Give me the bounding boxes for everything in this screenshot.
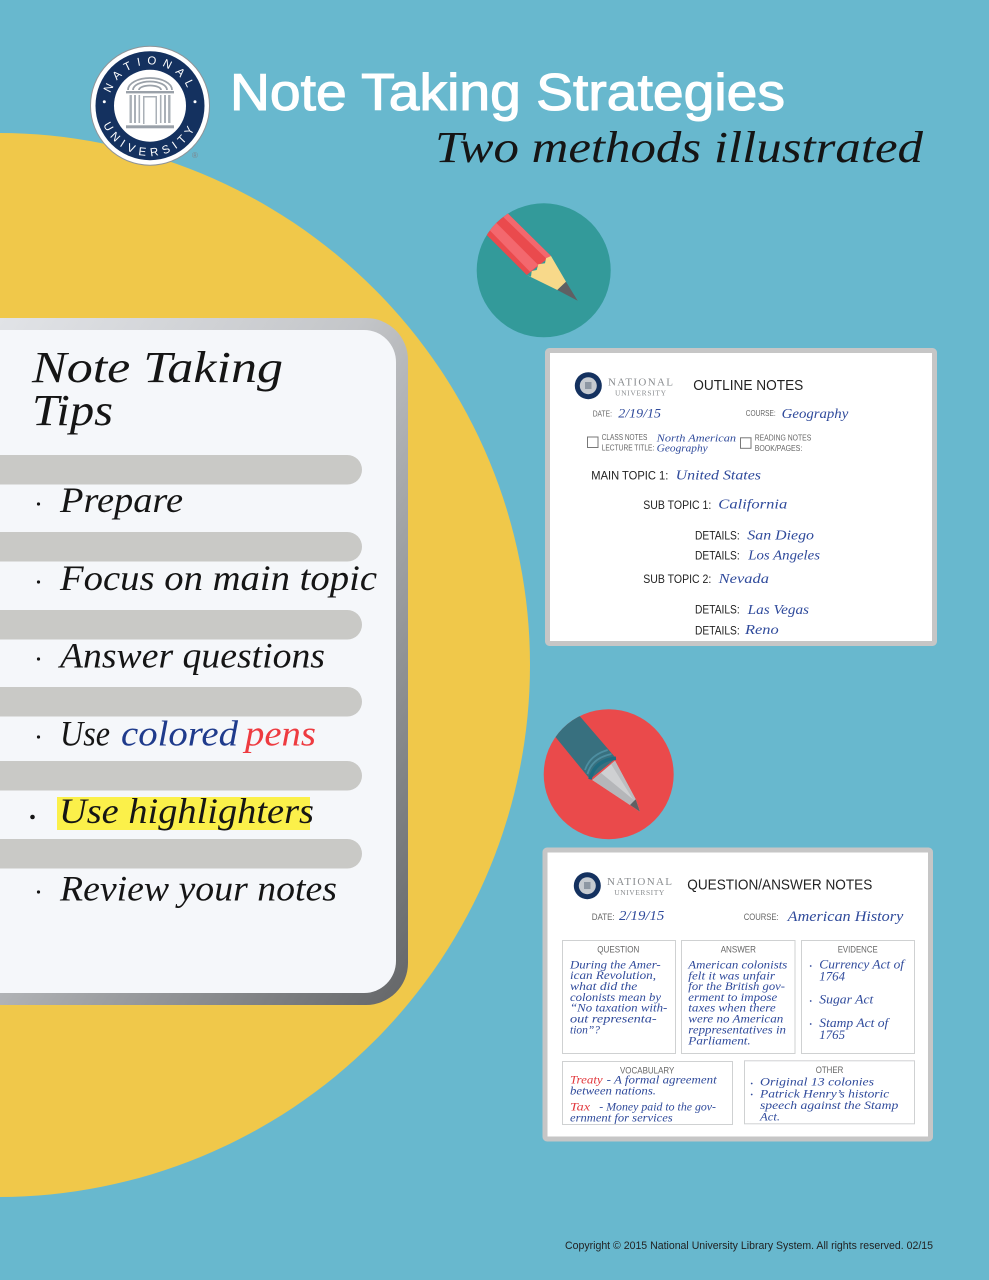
date and course xyxy=(592,909,904,925)
class notes checkbox xyxy=(588,432,737,455)
box: vocabulary: between nations. xyxy=(570,1086,656,1098)
logo: National University seal xyxy=(90,46,210,166)
box: other: Act. xyxy=(759,1110,780,1124)
outline entries: MAIN TOPIC 1: xyxy=(591,468,668,482)
box: question: what did the xyxy=(570,981,637,993)
box: vocabulary: ernment for services xyxy=(570,1113,673,1125)
title: Note Taking Strategies xyxy=(230,64,785,122)
box: answer: were no American xyxy=(688,1014,784,1026)
heading: note taking tips xyxy=(31,343,283,435)
box: answer: taxes when there xyxy=(688,1003,776,1015)
outline entries: Los Angeles xyxy=(747,549,821,564)
tip: focus on main topic: Focus on main topic xyxy=(59,558,377,598)
outline entries: DETAILS: xyxy=(695,603,740,617)
box: question: tion”? xyxy=(570,1025,600,1037)
mini logo xyxy=(574,872,672,899)
box: vocabulary: - Money paid to the gov- xyxy=(599,1102,716,1114)
class notes checkbox: LECTURE TITLE: xyxy=(602,443,654,452)
tip bars xyxy=(0,455,362,868)
box: vocabulary: - A formal agreement xyxy=(607,1075,718,1087)
yellow circle xyxy=(0,133,530,1197)
icon: pencil xyxy=(477,203,611,337)
box: evidence: 1765 xyxy=(819,1028,845,1042)
date and course: COURSE: xyxy=(746,409,776,418)
tip: use highlighters: Use highlighters xyxy=(59,791,314,831)
date and course: DATE: xyxy=(593,410,612,419)
tip: use colored pens: colored xyxy=(121,714,239,754)
box: other xyxy=(744,1061,914,1124)
box: answer: felt it was unfair xyxy=(688,970,776,982)
tip: use colored pens xyxy=(37,714,316,754)
date and course xyxy=(593,406,849,422)
outline entries: SUB TOPIC 2: xyxy=(643,572,711,586)
reading notes checkbox: BOOK/PAGES: xyxy=(755,444,802,453)
tip: review your notes: Review your notes xyxy=(59,868,337,908)
box: answer: for the British gov- xyxy=(688,981,785,993)
mini logo: UNIVERSITY xyxy=(615,389,667,398)
mini logo xyxy=(575,372,673,399)
form title: OUTLINE NOTES xyxy=(693,377,803,394)
box: answer: American colonists xyxy=(687,959,788,971)
logo: National University seal: NATIONAL xyxy=(103,56,192,92)
box: question: ican Revolution, xyxy=(570,970,656,982)
date and course: American History xyxy=(787,909,904,925)
box: question: out representa- xyxy=(570,1014,657,1026)
tip: use colored pens: pens xyxy=(242,714,316,754)
copyright: Copyright © 2015 National University Library System. All rights reserved. 02/15 xyxy=(565,1240,933,1252)
box: question xyxy=(562,940,676,1054)
subtitle: Two methods illustrated xyxy=(435,123,924,172)
class notes checkbox: Geography xyxy=(657,443,708,455)
box: answer: reppresentatives in xyxy=(688,1025,786,1037)
outline entries: United States xyxy=(676,469,762,484)
outline entries: DETAILS: xyxy=(695,528,740,542)
icon: pen xyxy=(544,704,674,839)
tip: prepare: Prepare xyxy=(59,480,183,520)
box: other: Patrick Henry’s historic xyxy=(759,1086,890,1100)
box: answer: Parliament. xyxy=(687,1036,751,1048)
box: answer: erment to impose xyxy=(688,992,777,1004)
box: question: “No taxation with- xyxy=(570,1003,667,1015)
date and course: 2/19/15 xyxy=(618,406,662,421)
class notes checkbox: North American xyxy=(656,432,737,444)
box: question: During the Amer- xyxy=(569,959,661,971)
box: evidence xyxy=(802,940,914,1054)
box: vocabulary: VOCABULARY xyxy=(620,1065,674,1075)
mini logo: NATIONAL xyxy=(607,876,672,888)
heading: note taking tips: Note Taking xyxy=(31,343,283,392)
box: vocabulary xyxy=(562,1062,732,1125)
reading notes checkbox xyxy=(740,434,811,453)
mini logo: NATIONAL xyxy=(608,377,673,389)
logo: National University seal: ® xyxy=(192,151,198,160)
box: answer: ANSWER xyxy=(721,944,756,954)
outline entries: Nevada xyxy=(718,572,769,587)
reading notes checkbox: READING NOTES xyxy=(755,434,811,442)
logo: National University seal: UNIVERSITY xyxy=(104,122,193,156)
box: evidence: Sugar Act xyxy=(819,993,874,1007)
outline entries: San Diego xyxy=(747,529,814,544)
box: vocabulary: Tax xyxy=(570,1102,591,1114)
box: vocabulary: Treaty xyxy=(570,1075,604,1087)
mini logo: UNIVERSITY xyxy=(614,888,665,897)
class notes checkbox: CLASS NOTES xyxy=(602,433,647,442)
form title: QUESTION/ANSWER NOTES xyxy=(687,876,872,893)
outline entries: Las Vegas xyxy=(747,603,810,618)
outline entries: Reno xyxy=(744,623,779,638)
box: other: speech against the Stamp xyxy=(760,1098,898,1112)
box: evidence: Stamp Act of xyxy=(819,1016,890,1030)
box: answer xyxy=(682,940,795,1054)
outline entries: SUB TOPIC 1: xyxy=(643,498,711,512)
panel: note taking tips xyxy=(0,318,408,1005)
box: question: QUESTION xyxy=(597,944,639,954)
outline entries xyxy=(591,468,821,638)
box: other: OTHER xyxy=(816,1065,844,1075)
panel: outline notes xyxy=(548,350,934,644)
box: evidence: Currency Act of xyxy=(819,958,906,972)
box: evidence: EVIDENCE xyxy=(838,944,878,954)
date and course: Geography xyxy=(782,407,849,422)
outline entries: California xyxy=(718,497,787,512)
box: evidence: 1764 xyxy=(819,969,845,983)
tip: use colored pens: Use xyxy=(60,714,110,754)
date and course: COURSE: xyxy=(744,912,779,922)
heading: note taking tips: Tips xyxy=(32,386,113,435)
date and course: 2/19/15 xyxy=(619,909,664,924)
box: question: colonists mean by xyxy=(570,992,662,1004)
outline entries: DETAILS: xyxy=(695,623,740,637)
outline entries: DETAILS: xyxy=(695,548,740,562)
tip: answer questions: Answer questions xyxy=(58,636,325,676)
box: other: Original 13 colonies xyxy=(760,1075,874,1089)
date and course: DATE: xyxy=(592,912,615,922)
panel: question and answer notes xyxy=(545,850,930,1139)
